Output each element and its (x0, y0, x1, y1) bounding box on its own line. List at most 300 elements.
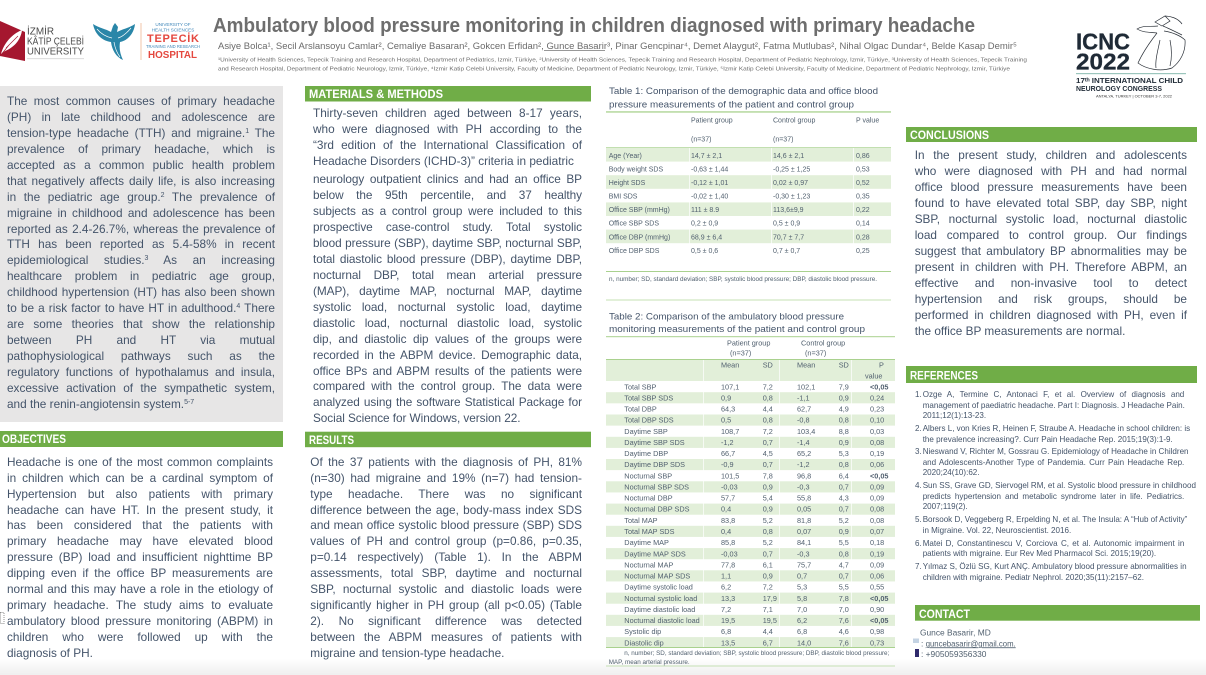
table 2: ambulatory blood pressure monitoring: 0,7 (763, 549, 773, 558)
table 2: ambulatory blood pressure monitoring: 85,8 (721, 538, 735, 547)
table 2: ambulatory blood pressure monitoring: 0,8 (839, 549, 849, 558)
text: objectives: ambulatory blood pressure monitoring (ABPM) in (7, 614, 273, 628)
reference 3: 2020;24(10):62. (923, 468, 980, 477)
table 2: ambulatory blood pressure monitoring: 4,4 (763, 405, 773, 414)
panel: introduction: in the pediatric age group.2 The prevalence of (7, 190, 275, 204)
table 2: ambulatory blood pressure monitoring: 0,10 (870, 416, 884, 425)
text: conclusions: office blood pressure measurements have been (915, 180, 1187, 194)
table 2: ambulatory blood pressure monitoring: 7,2 (763, 427, 773, 436)
table 2: ambulatory blood pressure monitoring: SD (839, 361, 849, 370)
table 2: ambulatory blood pressure monitoring: 0,05 (797, 505, 811, 514)
text: results: significantly higher in PH group (all p<0.05) (Table (310, 598, 582, 612)
table 2: ambulatory blood pressure monitoring: Total DBP SDS (624, 416, 674, 425)
text: materials and methods, second part: nocturnal DBP, total mean arterial pressure (313, 268, 582, 282)
text: conclusions (914, 148, 1188, 338)
reference 3: Nieswand V, Richter M, Gossrau G. Epidemiology of Headache in Children (923, 447, 1189, 456)
panel: introduction (0, 86, 283, 422)
contact details: Gunce Basarir, MD (920, 628, 991, 638)
text: materials and methods, first part: Thirty-seven children aged between 8-17 years, (313, 106, 582, 120)
table 2: ambulatory blood pressure monitoring: Total SBP SDS (624, 393, 673, 402)
table 2: ambulatory blood pressure monitoring: -1,2 (797, 460, 810, 469)
table 2: ambulatory blood pressure monitoring: -1,1 (797, 393, 810, 402)
table 1: demographic data and office blood pressure: -0,30 ± 1,23 (773, 194, 810, 200)
text: materials and methods, first part: who were diagnosed with PH according to the (313, 122, 582, 136)
table 2: ambulatory blood pressure monitoring: 0,7 (797, 572, 807, 580)
table 1: demographic data and office blood pressure: Patient group (691, 117, 733, 124)
reference 1: 2011;12(1):13-23. (923, 411, 986, 420)
table 2: ambulatory blood pressure monitoring: 5,5 (839, 538, 849, 547)
table 2: ambulatory blood pressure monitoring: -0,3 (797, 482, 810, 492)
text: objectives: primary headache. The study aims to evaluate (7, 598, 273, 612)
logo: ICNC 2022 congress (1076, 16, 1186, 98)
panel: introduction: childhood hypertension (HT) has also been shown (7, 285, 275, 299)
table 2: ambulatory blood pressure monitoring: 0,9 (763, 482, 773, 492)
table 1: demographic data and office blood pressure: 111 ± 8.9 (691, 207, 719, 214)
logo: Tepecik Training and Research Hospital: HEALTH SCIENCES (152, 28, 194, 32)
heading: results (305, 432, 591, 447)
table 2: ambulatory blood pressure monitoring: <0,05 (870, 471, 888, 480)
panel: introduction: epidemiological studies.3 As an increasing (7, 253, 275, 267)
table 2: ambulatory blood pressure monitoring: Daytime MAP SDS (624, 549, 686, 558)
table 2: ambulatory blood pressure monitoring: <0,05 (870, 382, 888, 391)
text: materials and methods, first part: “3rd edition of the International Classification of (313, 138, 582, 152)
table 2: ambulatory blood pressure monitoring: 0,7 (763, 460, 773, 469)
logo: ICNC 2022 congress: 2022 (1076, 48, 1130, 74)
table 2 footnote: n, number; SD, standard deviation; SBP, systolic blood pressure; DBP, diastolic blood pressure; (624, 650, 890, 657)
table 1: demographic data and office blood pressure: 113,6±9,9 (773, 207, 804, 214)
panel: introduction: that negatively affects daily life, is also increasing (7, 174, 275, 188)
text: conclusions: suggest that ambulatory BP abnormalities may be (915, 244, 1187, 258)
panel: introduction: (PH) in late childhood and adolescence are (7, 110, 275, 124)
table 2: ambulatory blood pressure monitoring: 0,8 (763, 393, 773, 402)
table 1: demographic data and office blood pressure: 0,5 ± 0,9 (773, 220, 800, 228)
table 1: demographic data and office blood pressure: Control group (773, 117, 816, 124)
text: materials and methods, second part: (MAP), daytime MAP, nocturnal MAP, daytime (313, 284, 582, 298)
text: results: values of PH and control group (p=0.86, p=0.35, (310, 534, 582, 548)
table 2: ambulatory blood pressure monitoring: 57,7 (721, 494, 735, 503)
reference 3 (915, 447, 1189, 477)
table 2: ambulatory blood pressure monitoring: 5,8 (797, 594, 807, 603)
table 2: ambulatory blood pressure monitoring: Nocturnal DBP (624, 494, 673, 503)
table 2: ambulatory blood pressure monitoring: 83,8 (721, 516, 735, 525)
table 2: ambulatory blood pressure monitoring: 4,9 (839, 405, 849, 414)
table 2: ambulatory blood pressure monitoring: 0,90 (870, 605, 884, 614)
table 1: demographic data and office blood pressure: -0,25 ± 1,25 (773, 166, 810, 174)
reference 1: Ozge A, Termine C, Antonaci F, et al. Overview of diagnosis and (923, 390, 1184, 399)
table 2: ambulatory blood pressure monitoring: 14,0 (797, 638, 811, 647)
table 2: ambulatory blood pressure monitoring: 13,5 (721, 638, 735, 647)
text: materials and methods, second part: diastolic load, nocturnal diastolic load, systolic (313, 316, 582, 330)
table 2: ambulatory blood pressure monitoring: 5,3 (797, 583, 807, 592)
table 2: ambulatory blood pressure monitoring: 17,9 (763, 594, 777, 603)
table 2: ambulatory blood pressure monitoring: 84,1 (797, 538, 811, 547)
table 1: demographic data and office blood pressure: 0,86 (856, 153, 870, 160)
reference 1 (915, 390, 1185, 420)
reference 1: management of paediatric headache. Part I: Diagnosis. J Headache Pain. (923, 400, 1185, 410)
table 2: ambulatory blood pressure monitoring: Nocturnal SBP SDS (624, 482, 689, 492)
table 1: demographic data and office blood pressure: -0,12 ± 1,01 (691, 180, 728, 187)
table 2: ambulatory blood pressure monitoring: 7,6 (839, 616, 849, 625)
panel: introduction: migraine in childhood and adolescence has been (7, 206, 275, 220)
panel: introduction: to be a risk factor to have HT in adulthood.4 There (7, 301, 275, 315)
text: materials and methods, second part: dip, and diastolic dip values of the groups were (313, 332, 582, 346)
table 2: ambulatory blood pressure monitoring: 0,7 (839, 482, 849, 492)
reference 6 (915, 539, 1184, 558)
text: results: type headache. There was no significant (310, 487, 582, 501)
contact details: : +905059356330 (921, 649, 987, 659)
table 2: ambulatory blood pressure monitoring: Daytime diastolic load (624, 605, 695, 614)
text: results: assessments, total SBP, daytime and nocturnal (310, 566, 582, 580)
text: objectives: has been considered that the patients with (7, 518, 273, 532)
text: objectives: pressure (BP) load and insufficient nighttime BP (7, 550, 273, 564)
reference 3: and Adolescents-Another Type of Pandemia. Curr Pain Headache Rep. (923, 458, 1184, 467)
title: Ambulatory blood pressure monitoring in children diagnosed with primary headache (213, 15, 975, 37)
table 2: ambulatory blood pressure monitoring: Total DBP (624, 405, 657, 414)
table 2: ambulatory blood pressure monitoring (606, 336, 895, 648)
table 1: demographic data and office blood pressure: P value (856, 117, 879, 124)
table 2: ambulatory blood pressure monitoring: 0,08 (870, 516, 884, 525)
table 2: ambulatory blood pressure monitoring: 6,8 (721, 627, 731, 636)
table 2: ambulatory blood pressure monitoring: 0,55 (870, 583, 884, 592)
icon: phone (915, 649, 919, 657)
panel: introduction: reported as 2.4-26.7%, whereas the prevalence of (7, 222, 275, 236)
table 2: ambulatory blood pressure monitoring: Total MAP (624, 516, 658, 525)
affiliations (218, 58, 1027, 72)
reference 3: 3. (915, 447, 922, 456)
text: objectives (7, 455, 274, 660)
text: objectives: Hypertension but also patients with primary (7, 487, 273, 501)
logo: Tepecik Training and Research Hospital: TRAINING AND RESEARCH (146, 44, 200, 50)
table 1: demographic data and office blood pressure: Office DBP SDS (609, 248, 660, 255)
heading: results: RESULTS (309, 435, 354, 447)
table 2: ambulatory blood pressure monitoring: 7,2 (721, 605, 731, 614)
panel: introduction: pathophysiological pathways such as the (7, 349, 275, 363)
table 1: demographic data and office blood pressure: 0,7 ± 0,7 (773, 248, 800, 255)
table 2: ambulatory blood pressure monitoring: SD (763, 361, 773, 370)
text: conclusions: In the present study, children and adolescents (915, 148, 1187, 162)
text: objectives: primary headache may have elevated blood (7, 534, 273, 548)
table 1: demographic data and office blood pressure: 0,52 (856, 180, 870, 187)
table 2: ambulatory blood pressure monitoring: 7,2 (763, 583, 773, 592)
heading: objectives: OBJECTIVES (2, 434, 66, 446)
table 2: ambulatory blood pressure monitoring: 0,8 (839, 416, 849, 425)
table 2: ambulatory blood pressure monitoring: 5,3 (839, 449, 849, 458)
text: materials and methods, second part: recorded in the ABPM device. Demographic data, (313, 348, 582, 362)
table 2: ambulatory blood pressure monitoring: 0,8 (839, 460, 849, 469)
text: conclusions: SBP, nocturnal systolic load, nocturnal diastolic (915, 212, 1187, 226)
logo: Izmir Katip Celebi University: İZMİR (27, 24, 54, 38)
table 2: ambulatory blood pressure monitoring: 96,8 (797, 471, 811, 480)
reference 5 (915, 515, 1187, 535)
text: conclusions: the office BP measurements are normal. (915, 324, 1125, 338)
table 2: ambulatory blood pressure monitoring: 0,06 (870, 572, 884, 580)
panel: introduction: are some theories that show the relationship (7, 317, 275, 331)
text: materials and methods, second part: subjects as a control group were included to this (313, 204, 582, 218)
table 2: ambulatory blood pressure monitoring: 75,7 (797, 560, 811, 569)
table 2: ambulatory blood pressure monitoring: 5,4 (763, 494, 773, 503)
table 2: ambulatory blood pressure monitoring: 0,4 (721, 505, 731, 514)
table 2: ambulatory blood pressure monitoring: Daytime DBP SDS (624, 460, 685, 469)
table 2: ambulatory blood pressure monitoring: 6,8 (797, 627, 807, 636)
authors: Asiye Bolca¹, Secil Arslansoyu Camlar², Cemaliye Basaran², Gokcen Erfidan², Gunce Basarir³, Pinar Gencpinar⁴, Demet Alaygut², Fatma Mutlubas², Nihal Olgac Dundar⁴, Belde Kasap Demir⁵ (218, 41, 1017, 52)
heading: references: REFERENCES (910, 368, 978, 382)
table 2: ambulatory blood pressure monitoring: 0,9 (839, 527, 849, 536)
table 1 title (609, 86, 878, 110)
text: materials and methods, first part: Headache Disorders (ICHD-3)” criteria in pediatric (313, 154, 574, 168)
text: results: SBP, nocturnal systolic and diastolic loads were (310, 582, 582, 596)
table 1: demographic data and office blood pressure: -0,63 ± 1,44 (691, 166, 728, 174)
table 2: ambulatory blood pressure monitoring: 65,2 (797, 449, 811, 458)
text: objectives: in children which can be a cardinal symptom of (7, 471, 273, 485)
table 2 title: monitoring measurements of the patient and control group (609, 324, 865, 335)
table 2: ambulatory blood pressure monitoring: 0,03 (870, 427, 884, 436)
table 2: ambulatory blood pressure monitoring: 107,1 (721, 382, 739, 391)
table 1: demographic data and office blood pressure: 70,7 ± 7,7 (773, 234, 804, 241)
table 2: ambulatory blood pressure monitoring: 0,9 (763, 505, 773, 514)
table 2: ambulatory blood pressure monitoring: Mean (721, 361, 739, 370)
logo: Tepecik Training and Research Hospital: HOSPITAL (148, 49, 198, 61)
table 2: ambulatory blood pressure monitoring: (n=37) (730, 348, 751, 357)
table 2: ambulatory blood pressure monitoring: -0,03 (721, 482, 738, 492)
table 2: ambulatory blood pressure monitoring: Nocturnal MAP SDS (624, 572, 690, 580)
table 2: ambulatory blood pressure monitoring: 0,8 (763, 416, 773, 425)
table 1 footnote: n, number; SD, standard deviation; SBP, systolic blood pressure; DBP, diastolic blood pressure. (609, 276, 877, 283)
table 2: ambulatory blood pressure monitoring: 55,8 (797, 494, 811, 503)
reference 4: Sun SS, Grave GD, Siervogel RM, et al. Systolic blood pressure in childhood (923, 481, 1196, 490)
text: materials and methods, second part: systolic load, nocturnal systolic load, daytime (313, 300, 582, 314)
text: results: and mean office systolic blood pressure (SBP) SDS (310, 518, 582, 532)
table 1: demographic data and office blood pressure: 0,22 (856, 207, 870, 214)
panel: introduction: The most common causes of primary headache (7, 94, 275, 108)
table 2: ambulatory blood pressure monitoring: 5,2 (763, 538, 773, 547)
heading: objectives (0, 431, 283, 447)
heading: conclusions: CONCLUSIONS (910, 130, 989, 142)
table 2: ambulatory blood pressure monitoring: 7,1 (763, 605, 773, 614)
table 1 title: Table 1: Comparison of the demographic data and office blood (609, 86, 878, 97)
table 2: ambulatory blood pressure monitoring: 0,08 (870, 505, 884, 514)
text: results: between the ABPM measures of patients with (310, 630, 582, 644)
table 1: demographic data and office blood pressure: 0,2 ± 0,9 (691, 220, 718, 228)
table 1: demographic data and office blood pressure: Body weight SDS (609, 166, 664, 174)
table 1: demographic data and office blood pressure: 68,9 ± 6,4 (691, 234, 722, 241)
text: conclusions: who were diagnosed with PH and had normal (915, 164, 1187, 178)
text: results: difference between the age, body-mass index SDS (310, 502, 582, 516)
table 2: ambulatory blood pressure monitoring: 7,0 (839, 605, 849, 614)
text: materials and methods, second part: prospective case-control study. Total systolic (313, 220, 582, 234)
contact details: : (921, 638, 923, 648)
text: conclusions: performed in children diagnosed with PH, even if (915, 308, 1187, 322)
table 2: ambulatory blood pressure monitoring: 19,5 (721, 616, 735, 625)
table 2: ambulatory blood pressure monitoring: 0,19 (870, 549, 884, 558)
table 2: ambulatory blood pressure monitoring: 7,2 (763, 382, 773, 391)
table 1: demographic data and office blood pressure: 0,02 ± 0,97 (773, 180, 808, 187)
table 2: ambulatory blood pressure monitoring: 6,4 (839, 471, 849, 480)
heading: materials and methods: MATERIALS & METHODS (309, 89, 443, 101)
text: materials and methods, second part: analyzed using the software Statistical Package for (313, 395, 582, 409)
table 2: ambulatory blood pressure monitoring: 101,5 (721, 471, 739, 480)
panel: introduction: TTH has been reported as 5.4-58% in recent (7, 237, 275, 251)
logo: ICNC 2022 congress: 17ᵗʰ INTERNATIONAL CHILD (1076, 78, 1183, 85)
table 2: ambulatory blood pressure monitoring: 0,7 (839, 572, 849, 580)
table 1: demographic data and office blood pressure: (n=37) (773, 136, 793, 143)
reference 6: 6. (915, 539, 922, 548)
reference 7: 7. (915, 562, 922, 571)
table 2: ambulatory blood pressure monitoring: 19,5 (763, 616, 777, 625)
text: materials and methods, first part (313, 106, 582, 168)
table 2: ambulatory blood pressure monitoring: 4,4 (763, 627, 773, 636)
table 2: ambulatory blood pressure monitoring: value (865, 372, 882, 381)
affiliations: ¹University of Health Sciences, Tepecik Training and Research Hospital, Department of Pediatrics, Izmir, Türkiye, ²University of Health Sciences, Tepecik Training and Research Hospital, Department of Pediatric Nephrology, Izmir, Türkiye, ³University of Health Sciences, Tepecik Training (218, 58, 1027, 64)
table 2: ambulatory blood pressure monitoring: 0,5 (721, 416, 731, 425)
reference 5: 5. (915, 515, 922, 524)
table 2: ambulatory blood pressure monitoring: 0,7 (763, 438, 773, 447)
text: objectives: Headache is one of the most common complaints (7, 455, 273, 469)
panel: introduction: between PH and HT via mutual (7, 333, 275, 347)
table 2: ambulatory blood pressure monitoring: -1,4 (797, 438, 810, 447)
table 2: ambulatory blood pressure monitoring: 4,3 (839, 494, 849, 503)
reference 4: 2007;119(2). (923, 502, 968, 511)
text: conclusions: effective and non-invasive tool to detect (915, 276, 1187, 290)
logo: ICNC 2022 congress: ICNC (1076, 28, 1130, 54)
text: materials and methods, second part: office BPs and ABPM results of the patients were (313, 364, 582, 378)
logo: Tepecik Training and Research Hospital (93, 22, 200, 61)
logo: Izmir Katip Celebi University (0, 21, 84, 61)
logo: Izmir Katip Celebi University: UNIVERSITY (27, 46, 84, 57)
table 2: ambulatory blood pressure monitoring: 62,7 (797, 405, 811, 414)
table 2 title (609, 311, 865, 335)
table 2: ambulatory blood pressure monitoring: 66,7 (721, 449, 735, 458)
table 1: demographic data and office blood pressure: Office DBP (mmHg) (609, 234, 670, 241)
text: materials and methods, second part: blood pressure (SBP), daytime SBP, nocturnal SBP, (313, 236, 582, 250)
table 2: ambulatory blood pressure monitoring: 0,73 (870, 638, 884, 647)
text: objectives: children who were followed up with the (7, 630, 273, 644)
heading: conclusions (906, 127, 1197, 142)
table 1: demographic data and office blood pressure: 0,25 (856, 248, 870, 255)
text: results: 2). No significant difference was detected (310, 614, 582, 628)
table 2: ambulatory blood pressure monitoring: Daytime SBP (624, 427, 668, 436)
table 1: demographic data and office blood pressure: Age (Year) (609, 153, 642, 160)
table 2: ambulatory blood pressure monitoring: Nocturnal systolic load (624, 594, 697, 603)
heading: materials and methods (305, 86, 591, 102)
panel: introduction: prevalence of primary headache, which is (7, 142, 275, 156)
logo: Izmir Katip Celebi University: KÂTİP ÇELEBİ (27, 34, 84, 47)
panel: introduction: accepted as a common public health problem (7, 158, 275, 172)
table 2: ambulatory blood pressure monitoring: 0,09 (870, 494, 884, 503)
table 1: demographic data and office blood pressure (606, 111, 891, 272)
text: objectives: dipping even if the office BP measurements are (7, 566, 273, 580)
reference 5: Borsook D, Veggeberg R, Erpelding N, et al. The Insula: A “Hub of Activity” (923, 515, 1187, 524)
logo: ICNC 2022 congress: NEUROLOGY CONGRESS (1076, 86, 1162, 93)
table 2: ambulatory blood pressure monitoring: -0,8 (797, 416, 810, 425)
table 2 title: Table 2: Comparison of the ambulatory blood pressure (609, 311, 844, 322)
table 2: ambulatory blood pressure monitoring: 7,9 (839, 382, 849, 391)
text: conclusions: load compared to control group. Our findings (915, 228, 1187, 242)
table 2: ambulatory blood pressure monitoring: 0,09 (870, 560, 884, 569)
table 2: ambulatory blood pressure monitoring: 5,2 (839, 516, 849, 525)
table 2: ambulatory blood pressure monitoring: 13,3 (721, 594, 735, 603)
reference 2: Albers L, von Kries R, Heinen F, Straube A. Headache in school children: is (923, 424, 1190, 433)
table 2: ambulatory blood pressure monitoring: Total MAP SDS (624, 527, 675, 536)
table 2: ambulatory blood pressure monitoring: 6,2 (721, 583, 731, 592)
panel: introduction: tension-type headache (TTH) and migraine.1 The (7, 126, 275, 140)
heading: contact: CONTACT (919, 607, 971, 621)
table 2: ambulatory blood pressure monitoring: Patient group (727, 338, 770, 347)
text: materials and methods, second part: compared with the control group. The data were (313, 379, 582, 393)
table 2: ambulatory blood pressure monitoring: 0,98 (870, 627, 884, 636)
table 2: ambulatory blood pressure monitoring: 7,0 (797, 605, 807, 614)
table 2: ambulatory blood pressure monitoring: 81,8 (797, 516, 811, 525)
logo: Tepecik Training and Research Hospital: UNIVERSITY OF (155, 22, 191, 27)
table 2: ambulatory blood pressure monitoring: 5,5 (839, 583, 849, 592)
table 2: ambulatory blood pressure monitoring: 0,09 (870, 482, 884, 492)
table 2: ambulatory blood pressure monitoring: -0,9 (721, 460, 734, 469)
text: materials and methods, second part: neurology outpatient clinics and had an office BP (313, 172, 582, 186)
text: results: (n=30) had migraine and 19% (n=7) had tension- (310, 471, 582, 485)
table 2: ambulatory blood pressure monitoring: Total SBP (624, 382, 656, 391)
table 2: ambulatory blood pressure monitoring: 0,18 (870, 538, 884, 547)
table 2 footnote (609, 650, 890, 666)
table 2: ambulatory blood pressure monitoring: (n=37) (805, 348, 826, 357)
table 2: ambulatory blood pressure monitoring: 0,07 (870, 527, 884, 536)
table 1: demographic data and office blood pressure: 0,53 (856, 166, 870, 174)
text: results: Of the 37 patients with the diagnosis of PH, 81% (310, 455, 582, 469)
table 2: ambulatory blood pressure monitoring: 7,8 (763, 471, 773, 480)
table 2: ambulatory blood pressure monitoring: Control group (801, 338, 845, 347)
table 2: ambulatory blood pressure monitoring: Mean (797, 361, 815, 370)
reference 4: 4. (915, 481, 922, 490)
table 1: demographic data and office blood pressure: 0,5 ± 0,6 (691, 248, 718, 255)
table 1: demographic data and office blood pressure: 0,28 (856, 234, 870, 241)
table 1: demographic data and office blood pressure: 14,6 ± 2,1 (773, 153, 804, 160)
table 2: ambulatory blood pressure monitoring: -0,3 (797, 549, 810, 558)
reference 4: predicts hypertension and metabolic syndrome later in life. Pediatrics. (923, 492, 1184, 501)
table 2: ambulatory blood pressure monitoring: 0,8 (763, 527, 773, 536)
table 2: ambulatory blood pressure monitoring: 0,24 (870, 393, 884, 402)
reference 7: Yılmaz S, Özlü SG, Kurt ANÇ. Ambulatory blood pressure abnormalities in (923, 562, 1187, 571)
table 2: ambulatory blood pressure monitoring: 0,9 (839, 393, 849, 402)
table 1: demographic data and office blood pressure: 14,7 ± 2,1 (691, 153, 722, 160)
table 2: ambulatory blood pressure monitoring: 4,6 (839, 627, 849, 636)
table 1: demographic data and office blood pressure: Office SBP SDS (609, 220, 659, 228)
table 1: demographic data and office blood pressure: BMI SDS (609, 194, 638, 200)
panel: introduction: excessive activation of the sympathetic system, (7, 381, 275, 395)
table 2: ambulatory blood pressure monitoring: 6,2 (797, 616, 807, 625)
reference 6: Matei D, Constantinescu V, Corciova C, et al. Autonomic impairment in (923, 539, 1184, 548)
table 2: ambulatory blood pressure monitoring: P (879, 361, 884, 370)
table 1 title: pressure measurements of the patient and control group (609, 99, 854, 110)
table 2: ambulatory blood pressure monitoring: Nocturnal DBP SDS (624, 505, 690, 514)
table 2: ambulatory blood pressure monitoring: 0,06 (870, 460, 884, 469)
text: objectives: diagnosis of PH. (7, 646, 93, 660)
text: conclusions: hypertension and risk groups, should be (915, 292, 1187, 306)
table 2: ambulatory blood pressure monitoring: 0,08 (870, 438, 884, 447)
table 2: ambulatory blood pressure monitoring: 4,7 (839, 560, 849, 569)
text: materials and methods, second part (313, 172, 582, 425)
table 1: demographic data and office blood pressure: -0,02 ± 1,40 (691, 194, 728, 200)
table 2: ambulatory blood pressure monitoring: -1,2 (721, 438, 734, 447)
reference 7 (915, 562, 1187, 582)
table 2: ambulatory blood pressure monitoring: 108,7 (721, 427, 739, 436)
heading: contact (915, 605, 1200, 621)
text: conclusions: present in children with PH. Therefore ABPM, an (915, 260, 1187, 274)
text: materials and methods, second part: Social Science for Windows, version 22. (313, 411, 520, 425)
table 2: ambulatory blood pressure monitoring: 0,9 (839, 438, 849, 447)
table 1: demographic data and office blood pressure: 0,35 (856, 194, 870, 200)
table 1: demographic data and office blood pressure: (n=37) (691, 136, 711, 143)
table 2: ambulatory blood pressure monitoring: 8,8 (839, 427, 849, 436)
table 2: ambulatory blood pressure monitoring: <0,05 (870, 594, 888, 603)
text: materials and methods, second part: total diastolic blood pressure (DBP), daytime DBP, (313, 252, 582, 266)
